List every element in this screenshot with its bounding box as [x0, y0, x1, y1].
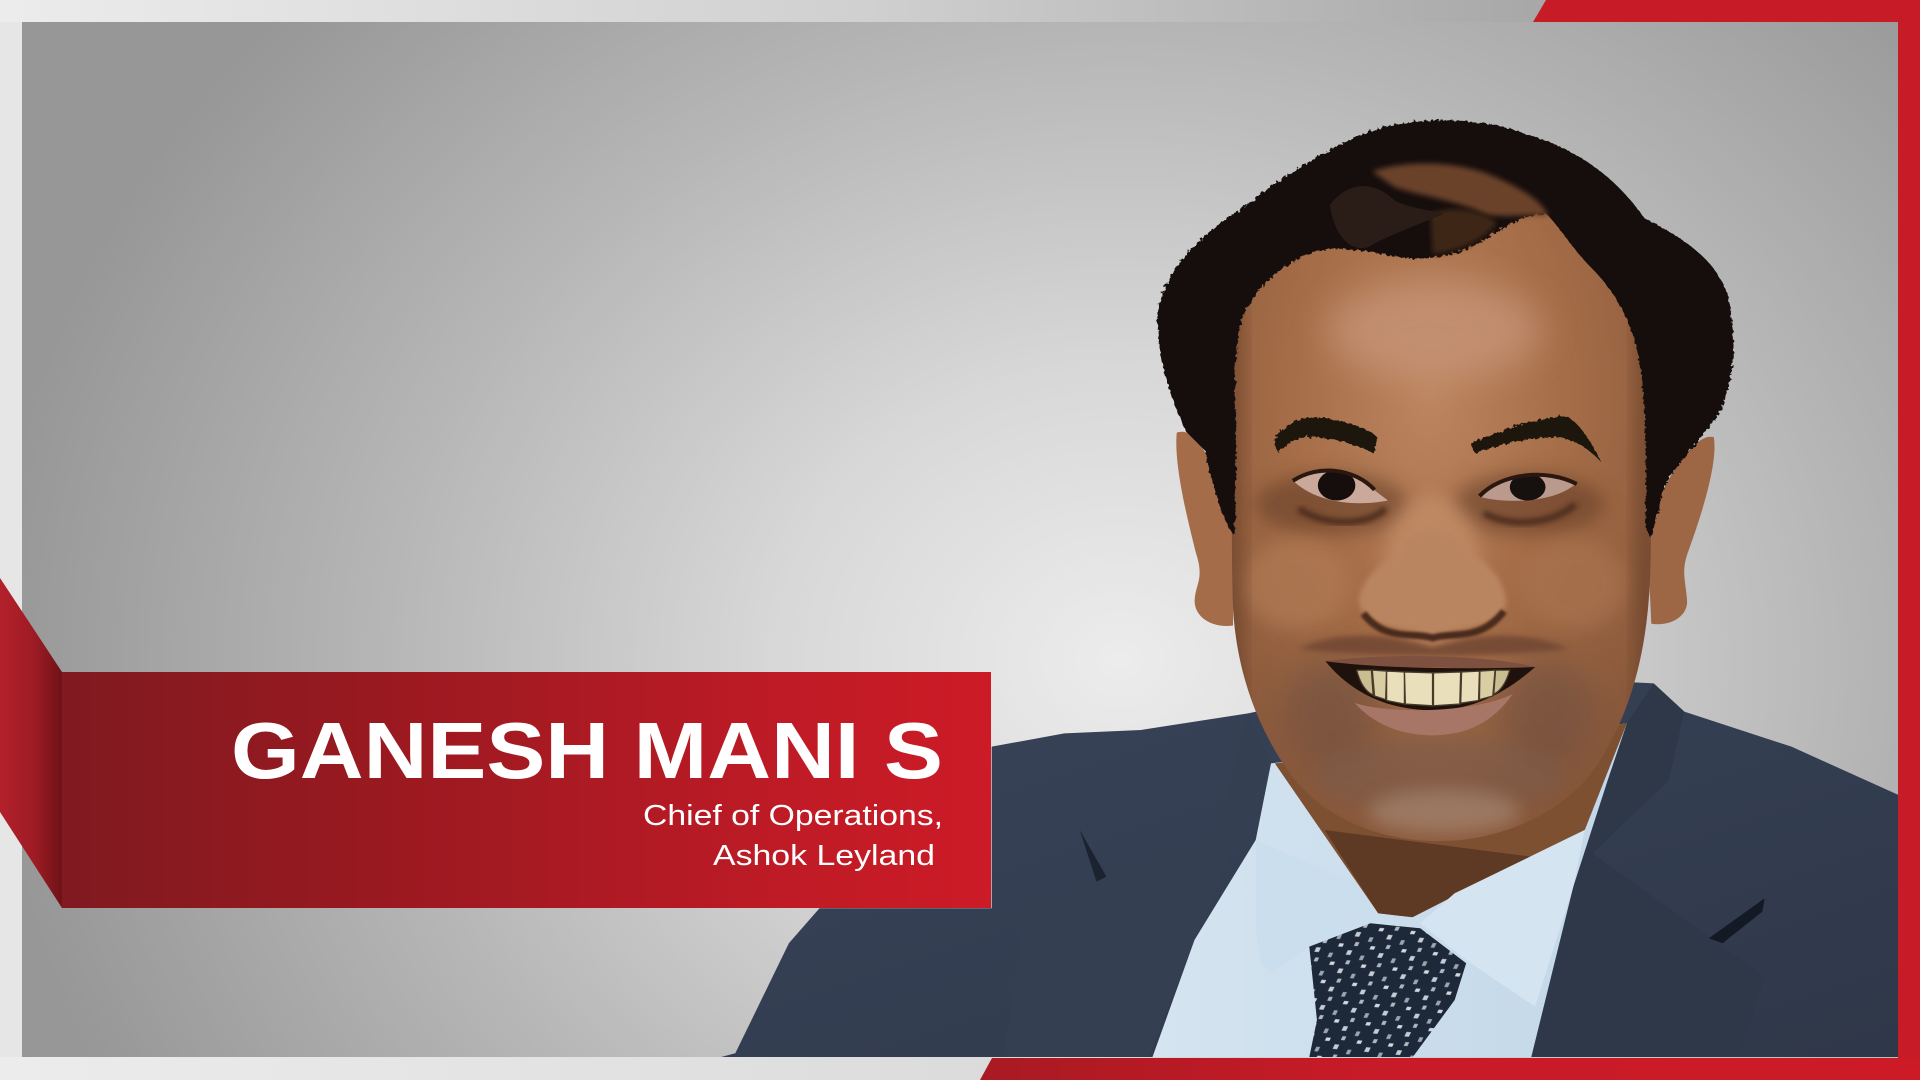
- open mouth: [1325, 661, 1535, 710]
- left lapel shading: [1003, 713, 1271, 1057]
- brown thinning patch: [1430, 209, 1497, 254]
- face: [1232, 165, 1651, 841]
- right eye: [1479, 474, 1577, 522]
- left collar: [1256, 840, 1257, 841]
- right lapel buttonhole: [1709, 898, 1765, 943]
- banner fold: [0, 578, 62, 908]
- teeth: [1357, 670, 1510, 706]
- right eyebrow: [1471, 416, 1601, 462]
- red frame accents: [980, 0, 1920, 1080]
- right lapel shading: [1592, 684, 1684, 828]
- banner body: [62, 672, 991, 908]
- name banner: [0, 578, 991, 908]
- neck shadow: [1325, 830, 1531, 917]
- smile lines and upper lip: [1299, 635, 1569, 656]
- right ear: [1647, 437, 1715, 624]
- face shading: [1221, 281, 1658, 834]
- name heading: GANESH MANI S: [231, 706, 943, 795]
- right collar: [1420, 830, 1585, 1007]
- nose shadow: [1363, 611, 1504, 638]
- left eye: [1293, 470, 1388, 522]
- portrait photo illustration: [720, 120, 1899, 1057]
- head: [1158, 120, 1734, 841]
- left eyebrow: [1274, 417, 1378, 453]
- exposed scalp: [1372, 164, 1549, 216]
- left ear: [1176, 432, 1234, 626]
- jacket and shirt: [720, 673, 1899, 1057]
- curl of hair: [1330, 186, 1444, 248]
- tie: [1309, 923, 1466, 1057]
- nose: [1358, 563, 1508, 628]
- jacket notch: [1080, 830, 1106, 882]
- hair: [1158, 120, 1734, 538]
- neck: [1275, 723, 1627, 917]
- lower lip: [1354, 694, 1513, 735]
- company name: Ashok Leyland: [713, 840, 935, 872]
- shirt: [1152, 723, 1627, 1057]
- job title: Chief of Operations,: [643, 800, 943, 832]
- suit jacket: [720, 673, 1899, 1057]
